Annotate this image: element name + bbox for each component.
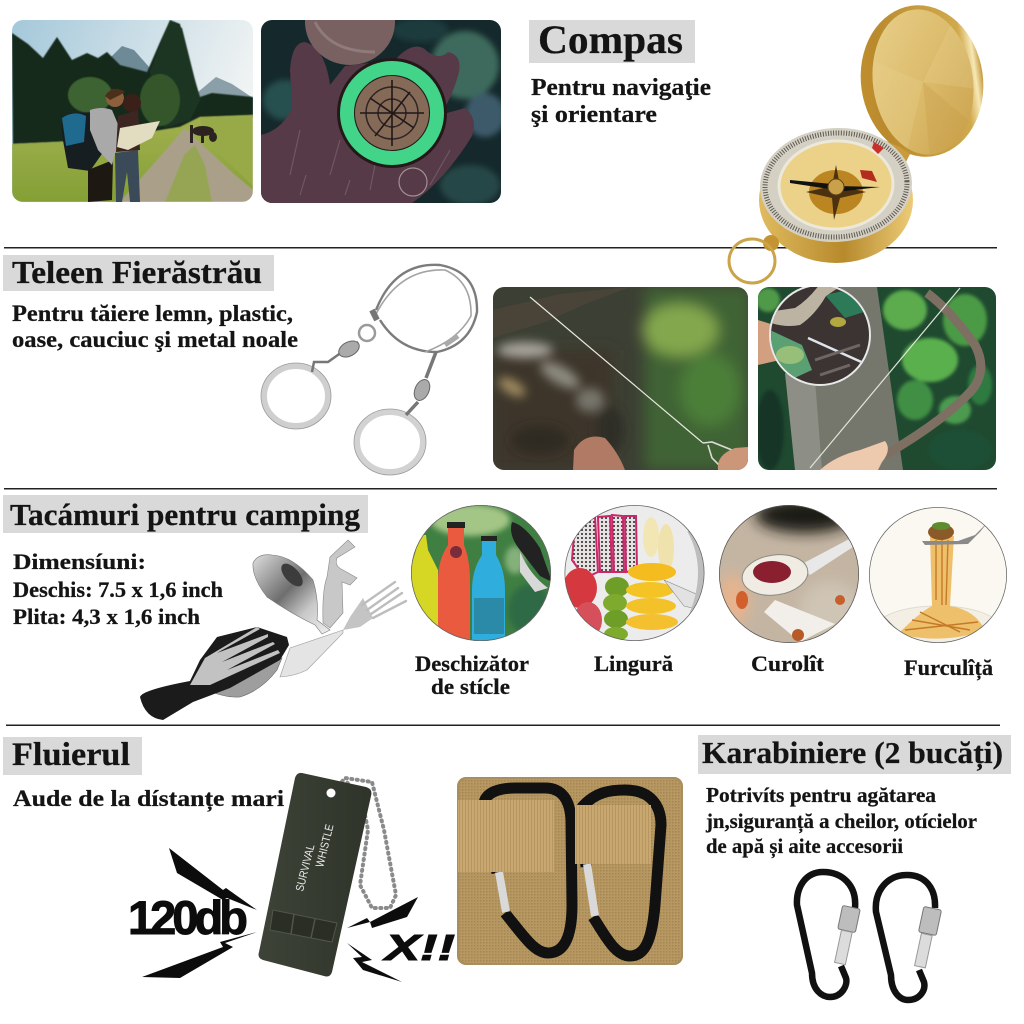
labels: cutlery functions: Curolît (751, 651, 825, 676)
section heading: Teleen Fierăstrău: Teleen Fierăstrău (12, 254, 262, 290)
text: compass description: şi orientare (531, 102, 657, 128)
icon: brass compass (729, 0, 993, 283)
text: saw description: oase, cauciuc şi metal noale (12, 327, 298, 352)
circle photo: bottle opener (409, 503, 553, 643)
knife blade (280, 630, 343, 677)
icon: small carabiner left (797, 872, 860, 997)
circle photo: spoon with fruit (562, 503, 706, 643)
text: saw description (12, 301, 298, 352)
text: compass description: Pentru navigaţie (531, 75, 711, 101)
labels: cutlery functions (415, 651, 993, 699)
text: whistle description: Aude de la dístanțe mari (13, 786, 285, 812)
circle photo: knife with soup (717, 497, 861, 645)
labels: cutlery functions: Furculîță (904, 655, 993, 681)
section heading: Tacámuri pentru camping: Tacámuri pentru camping (10, 497, 360, 532)
icon: survival whistle with chain: WHISTLE (314, 823, 337, 869)
icon: wire saw (261, 265, 477, 475)
divider three (6, 724, 1000, 726)
icon: sound bolts right (347, 897, 418, 982)
icon: folding cutlery set (140, 540, 406, 720)
photo: hikers reading a map (12, 20, 253, 202)
circle photo: fork with spaghetti (868, 506, 1008, 650)
bottle opener blade (323, 540, 357, 628)
photo: sawing a branch (493, 287, 750, 470)
icon: sound bolts left (142, 848, 257, 978)
icon: small carabiner right (876, 875, 942, 1000)
text: cutlery dimensions: Dimensíuni: (13, 549, 146, 574)
folded fork (190, 627, 280, 685)
labels: cutlery functions: de stícle (431, 674, 510, 699)
photo: bow saw at a tree with inset (756, 284, 996, 470)
section heading: Karabiniere: Karabiniere (2 bucăți) (702, 735, 1003, 771)
labels: cutlery functions: Lingură (594, 651, 673, 676)
text: carabiner description: Potrivíts pentru agătarea (706, 783, 937, 807)
icon: survival whistle with chain: SURVIVAL (294, 843, 318, 893)
text: cutlery dimensions (13, 549, 223, 629)
divider two (4, 488, 997, 490)
labels: cutlery functions: Deschizător (415, 651, 529, 676)
text: cutlery dimensions: Deschis: 7.5 x 1,6 inch (13, 577, 223, 602)
spoon (253, 555, 330, 634)
text: saw description: Pentru tăiere lemn, plastic, (12, 301, 293, 326)
fork (343, 582, 406, 630)
inset: close-up of wire cutting (768, 284, 870, 385)
black handle (140, 627, 289, 720)
text: X!!: X!! (382, 927, 455, 968)
text: compass description (531, 75, 711, 128)
text: carabiner description (705, 783, 977, 859)
icon: carabiners in tan pouch (457, 777, 683, 965)
text: carabiner description: de apă și aite accesorii (706, 834, 903, 859)
text: carabiner description: jn,siguranță a cheilor, otícielor (705, 809, 977, 834)
photo: glowing compass in hand (261, 20, 501, 203)
text: 120db: 120db (128, 891, 248, 944)
icon: survival whistle with chain (258, 773, 396, 976)
section heading: Compas: Compas (538, 17, 683, 62)
divider one (4, 247, 997, 248)
section heading: Fluierul: Fluierul (12, 737, 130, 773)
folded spoon bowl (207, 658, 282, 697)
text: cutlery dimensions: Plita: 4,3 x 1,6 inch (13, 604, 200, 629)
